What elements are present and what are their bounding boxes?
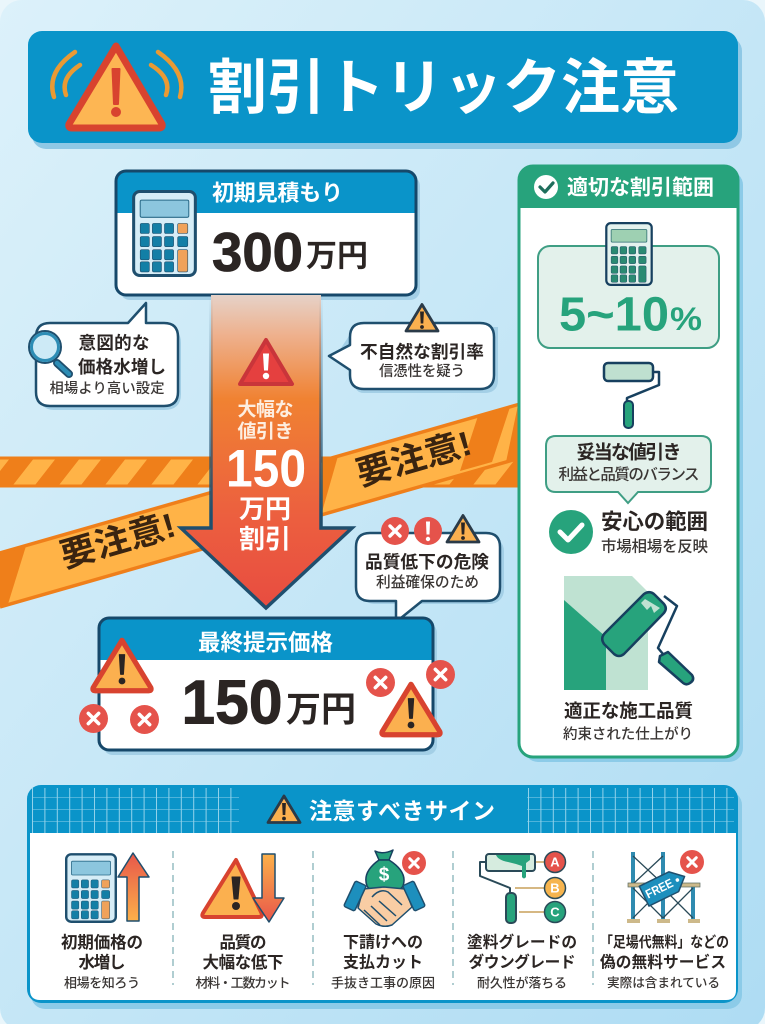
icon: handshake [344, 881, 425, 926]
title: 割引トリック注意 [208, 54, 679, 122]
icon: red warning [240, 340, 292, 384]
icon: calculator [134, 192, 195, 275]
tape label left: 要注意! [56, 506, 180, 576]
callout: intentional markup: 価格水増し [78, 357, 166, 377]
icon: cross 2 [130, 705, 159, 734]
icon: scaffold [627, 852, 700, 921]
icon: warning left [93, 640, 151, 691]
sign 3: 手抜き工事の原因 [331, 976, 435, 990]
icon: small warning [406, 304, 438, 331]
icon: green calculator [606, 223, 652, 285]
panel: appropriate discount range: 安心の範囲 [601, 510, 708, 534]
card: final price [79, 618, 455, 755]
big down arrow: 値引き [238, 420, 294, 442]
icon: money bag: $ [379, 864, 390, 886]
bubble: fair discount [546, 436, 711, 503]
icon: cross 3 [366, 668, 395, 697]
sign 4 [467, 852, 577, 990]
sign 5: 偽の無料サービス [600, 952, 726, 972]
callout: intentional markup: 意図的な [78, 333, 150, 353]
sign 1: 初期価格の [61, 933, 143, 952]
card: initial estimate [116, 171, 420, 300]
card: final price: 150 [182, 668, 282, 738]
heading icon [268, 796, 300, 822]
callout: unnatural discount [329, 304, 498, 393]
icon: roller with grades [480, 852, 566, 923]
icon: paint roller [604, 363, 659, 428]
big down arrow: 割引 [239, 524, 291, 554]
card: final price: 最終提示価格 [198, 630, 333, 656]
icon: up arrow [118, 853, 149, 921]
bubble: fair discount: 利益と品質のバランス [558, 466, 700, 484]
panel: appropriate discount range: 市場相場を反映 [601, 538, 708, 556]
icon: check [534, 175, 558, 199]
card: final price: 万円 [286, 690, 356, 730]
icon: roller with grades: A [550, 854, 560, 870]
icon: cross 1 [79, 704, 108, 733]
amount: 300 [212, 221, 303, 283]
icon: exclamation [232, 877, 240, 910]
sign 4: 塗料グレードの [467, 932, 577, 952]
sign 1: 相場を知ろう [64, 976, 140, 990]
big down arrow: 万円 [239, 494, 291, 524]
sign 5 [600, 850, 729, 990]
icon: cross 4 [426, 660, 455, 689]
icon: money bag [366, 850, 404, 892]
icon: down arrow [253, 854, 284, 922]
icon: calculator [66, 854, 116, 922]
callout: unnatural discount: 信憑性を疑う [379, 363, 465, 380]
callout: unnatural discount: 不自然な割引率 [360, 341, 484, 362]
sign 4: ダウングレード [468, 952, 576, 972]
panel: warning signs [27, 785, 742, 1009]
title banner [28, 31, 742, 149]
sign 1 [61, 853, 149, 990]
sign 5: 実際は含まれている [607, 975, 720, 990]
icon: roller with grades: B [550, 880, 560, 896]
sign 5: 「足場代無料」などの [600, 933, 729, 951]
icon: painted wall and roller [564, 576, 693, 690]
icon: warning [447, 516, 479, 542]
hazard tape diagonal [0, 404, 520, 607]
icon: free tag: FREE [643, 876, 676, 901]
tape label right: 要注意! [352, 424, 476, 494]
arrow caption: 大幅な [238, 398, 294, 420]
sign 3 [331, 850, 435, 990]
sign 2: 材料・工数カット [196, 976, 290, 990]
callout: intentional markup [29, 303, 181, 410]
bubble: fair discount: 妥当な値引き [576, 442, 682, 464]
icon: warning right [382, 684, 440, 735]
sign 1: 水増し [78, 952, 126, 972]
icon: warning [202, 860, 262, 917]
card heading: 初期見積もり [212, 180, 343, 206]
panel: appropriate discount range: 約束された仕上がり [563, 725, 693, 743]
callout: quality decline: 利益確保のため [376, 574, 479, 591]
sign 2: 品質の [220, 933, 266, 952]
icon: cross [381, 517, 409, 545]
panel: warning signs: 注意すべきサイン [309, 798, 495, 824]
sign 3: 下請けへの [343, 934, 423, 952]
panel: appropriate discount range: 適正な施工品質 [564, 700, 693, 722]
icon: magnifier [29, 331, 69, 374]
callout: intentional markup: 相場より高い設定 [50, 380, 164, 397]
rate box: 5~10 [559, 288, 669, 342]
sign 2 [196, 854, 290, 990]
big down arrow: 150 [226, 440, 306, 498]
rate box [538, 223, 719, 348]
sign 4: 耐久性が落ちる [477, 976, 567, 990]
panel: appropriate discount range: 適切な割引範囲 [567, 176, 714, 200]
icon: big check [549, 510, 593, 554]
sign 2: 大幅な低下 [202, 953, 284, 972]
icon: cross [680, 850, 704, 874]
icon: cross [402, 851, 426, 875]
sign 3: 支払カット [343, 952, 423, 972]
panel: appropriate discount range [519, 166, 743, 762]
hazard tape horizontal [0, 457, 520, 487]
icon: exclamation [414, 517, 442, 545]
icon: warning triangle with signal arcs [52, 46, 181, 128]
rate box: % [670, 301, 702, 337]
unit: 万円 [306, 238, 368, 274]
big down arrow [181, 295, 352, 608]
callout: quality decline: 品質低下の危険 [365, 552, 489, 572]
icon: roller with grades: C [550, 904, 560, 920]
callout: quality decline [356, 516, 504, 622]
